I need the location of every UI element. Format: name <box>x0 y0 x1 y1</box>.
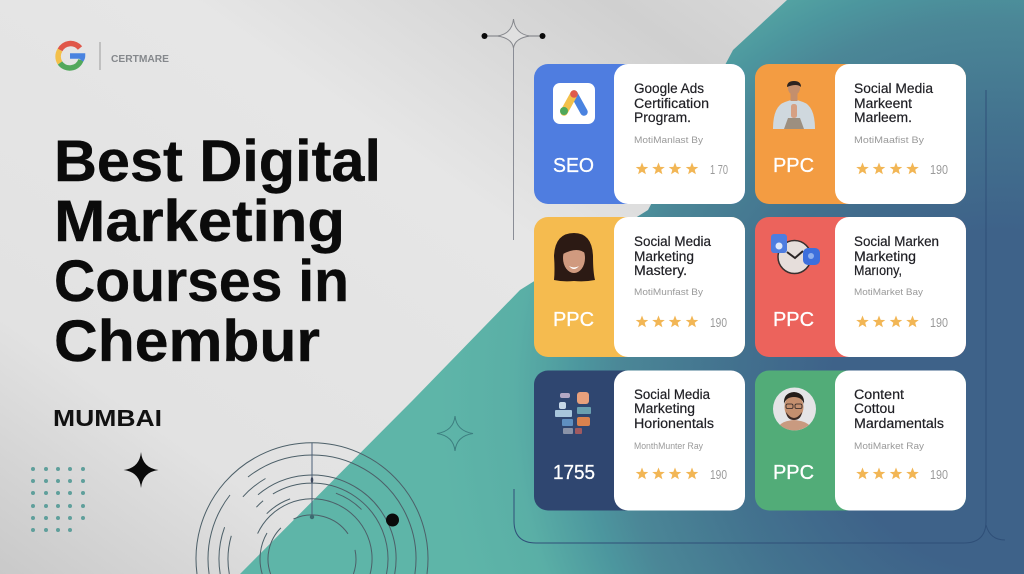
title: Courses in <box>54 249 349 314</box>
decorative concentric circles <box>196 443 428 574</box>
star rating <box>856 468 919 479</box>
card: Content Cottou Mardamentals: 190 <box>930 467 948 482</box>
title <box>54 129 381 374</box>
icon: google ads <box>553 83 595 124</box>
icon: media mosaic <box>555 392 591 434</box>
card: Google Ads: Certification <box>634 96 709 111</box>
card: Google Ads: 1 70 <box>710 162 728 177</box>
card: Social Media Marketing Horionentals: Marketing <box>634 401 695 416</box>
card: Social Media Markeent: Markeent <box>854 96 912 111</box>
card: Social Media Marketing Mastery: Social Media <box>634 234 711 249</box>
black sparkle <box>124 452 158 488</box>
star rating <box>636 316 698 327</box>
outline star on teal <box>437 416 473 451</box>
title: Chembur <box>54 309 320 374</box>
logo <box>58 42 169 70</box>
icon: google G <box>58 44 82 68</box>
card: Social Marken Marketing: Marketing <box>854 249 916 264</box>
card: Social Media Markeent: Social Media <box>854 81 933 96</box>
card: Content Cottou Mardamentals: PPC <box>773 462 814 484</box>
card: Social Marken Marketing: Marıony, <box>854 263 902 278</box>
card: Social Media Markeent <box>755 64 966 204</box>
card: Google Ads <box>534 64 745 204</box>
card: Social Media Marketing Horionentals <box>534 370 745 510</box>
card: Social Marken Marketing: Social Marken <box>854 234 939 249</box>
logo: CERTMARE <box>111 53 169 65</box>
card: Social Media Marketing Horionentals: 190 <box>710 467 727 482</box>
card: Social Marken Marketing: PPC <box>773 309 814 331</box>
card: Social Media Marketing Mastery: Mastery. <box>634 263 687 278</box>
dot grid <box>31 467 85 532</box>
card: Social Media Marketing Mastery: MotiMunfast By <box>634 287 704 297</box>
card: Social Media Marketing Horionentals: MonthMunter Ray <box>634 441 703 451</box>
card: Content Cottou Mardamentals: Mardamentals <box>854 416 944 431</box>
card: Social Media Markeent: 190 <box>930 162 948 177</box>
card: Social Marken Marketing: 190 <box>930 315 948 330</box>
card: Social Marken Marketing <box>755 217 966 357</box>
card: Social Media Markeent: MotiMaafist By <box>854 135 925 145</box>
card: Google Ads: Program. <box>634 110 691 125</box>
icon: woman portrait <box>554 233 595 281</box>
title: Best Digital <box>54 129 381 194</box>
star rating <box>636 468 698 479</box>
background: teal to blue diagonal <box>240 0 1024 574</box>
card: Social Media Marketing Mastery: PPC <box>553 309 594 331</box>
icon: clock with badges <box>771 234 820 274</box>
card: Social Media Marketing Horionentals: Horionentals <box>634 416 714 431</box>
title: Marketing <box>54 189 345 254</box>
card: Content Cottou Mardamentals: MotiMarket Ray <box>854 441 925 451</box>
card: Social Media Markeent: PPC <box>773 155 814 177</box>
card: Google Ads: MotiManlast By <box>634 135 704 145</box>
card: Google Ads: Google Ads <box>634 81 704 96</box>
card: Social Media Markeent: Marleem. <box>854 110 912 125</box>
frame lines <box>514 90 1005 543</box>
card: Social Media Marketing Mastery <box>534 217 745 357</box>
card: Google Ads: SEO <box>553 155 594 177</box>
card: Social Media Marketing Mastery: Marketing <box>634 249 694 264</box>
card: Content Cottou Mardamentals <box>755 370 966 510</box>
top star ornament with line <box>482 19 546 240</box>
card: Social Media Marketing Horionentals: Social Media <box>634 387 710 402</box>
card: Social Media Marketing Mastery: 190 <box>710 315 727 330</box>
card: Content Cottou Mardamentals: Cottou <box>854 401 895 416</box>
icon: man portrait <box>773 388 816 430</box>
card: Social Media Marketing Horionentals: 1755 <box>553 462 595 484</box>
star rating <box>636 162 698 174</box>
subtitle: MUMBAI <box>53 405 162 431</box>
icon: presenter <box>773 81 815 129</box>
star rating <box>856 316 919 327</box>
card: Social Marken Marketing: MotiMarket Bay <box>854 287 924 297</box>
card: Content Cottou Mardamentals: Content <box>854 387 904 402</box>
star rating <box>856 162 919 174</box>
